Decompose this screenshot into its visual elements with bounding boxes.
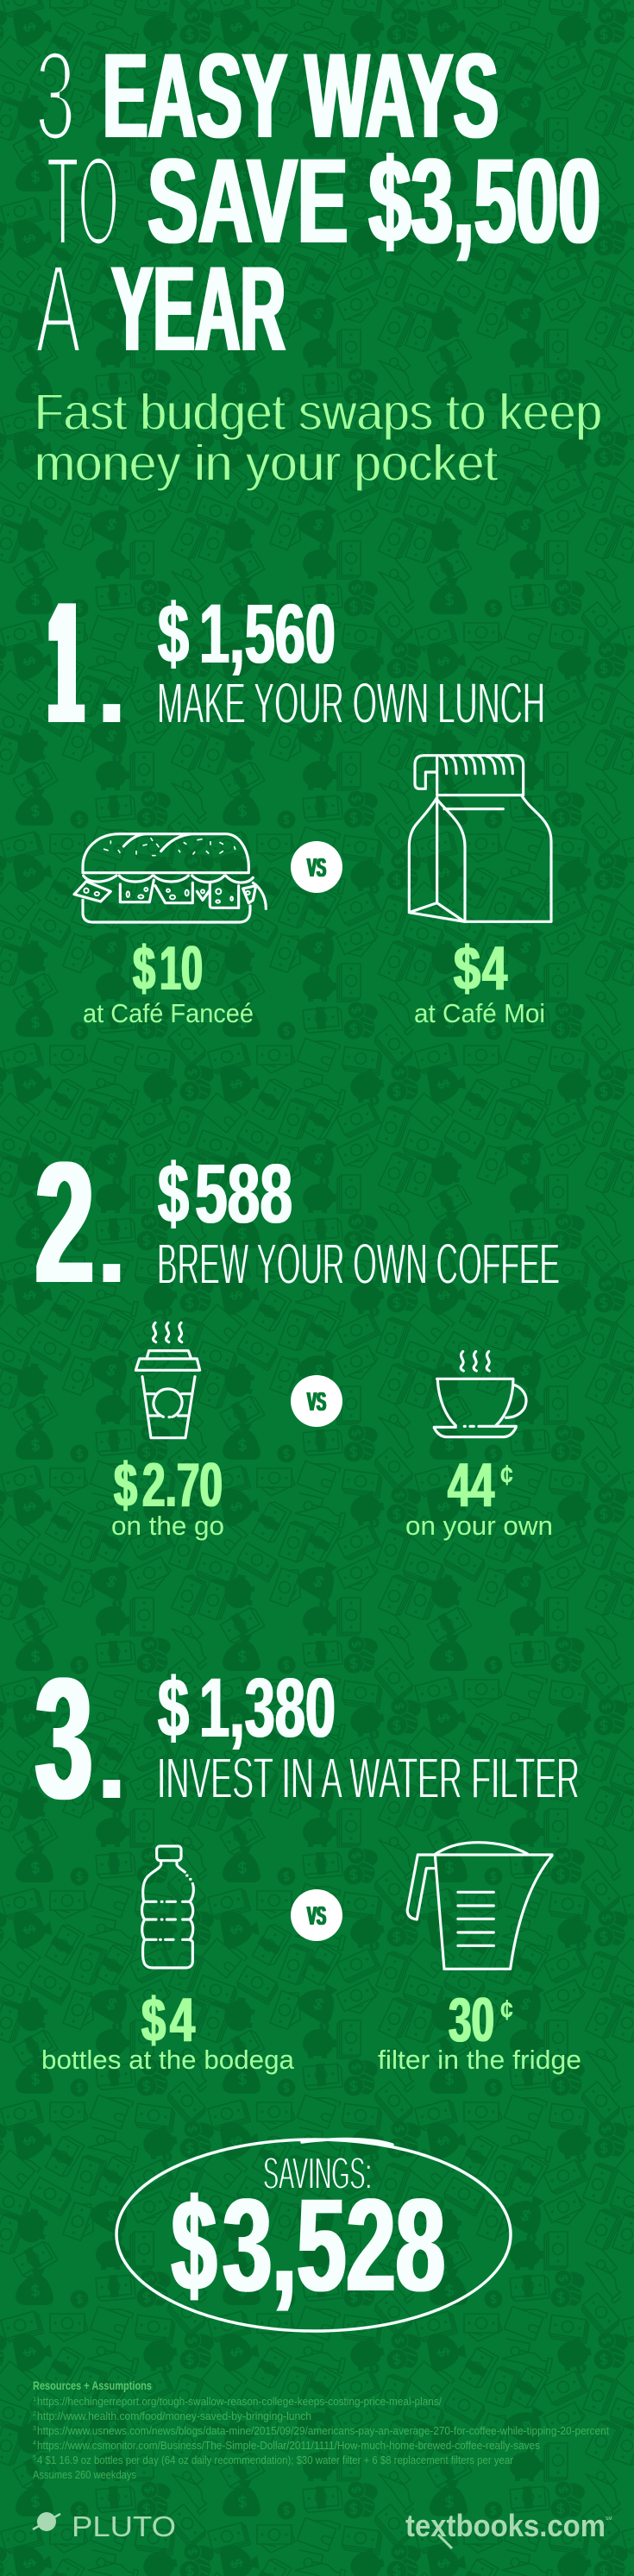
resources and assumptions: 4 (33, 2441, 36, 2447)
price: home (414, 934, 545, 1028)
amount (158, 1661, 336, 1755)
price: bottles (41, 1986, 295, 2075)
number 1: 1 (50, 567, 81, 759)
subtitle: money in your pocket (35, 435, 498, 492)
resources and assumptions: https://hechingerreport.org/tough-swallow-reason-college-keeps-costing-price-meal-plans/ (37, 2395, 442, 2408)
number 3: . (95, 1688, 129, 1824)
icon: water filter pitcher (407, 1843, 552, 1969)
price: on the go: on the go (111, 1511, 224, 1541)
amount: $ (158, 587, 189, 681)
number 2: 2 (35, 1127, 94, 1319)
vs badge: VS (307, 1901, 326, 1931)
resources and assumptions: https://www.csmonitor.com/Business/The-Simple-Dollar/2011/1111/How-much-home-brewed-coffee-really-saves (37, 2439, 540, 2452)
price: cafe: at Café Fanceé (83, 998, 254, 1028)
hand drawn ellipse (116, 2139, 511, 2331)
resources and assumptions: 2 (33, 2411, 36, 2417)
resources and assumptions: 3 (33, 2426, 36, 2432)
vs badge (291, 1375, 342, 1427)
callout: total savings (116, 2139, 511, 2331)
price: filter: ¢ (500, 1994, 513, 2026)
logo: textbooks.com: SM (606, 2516, 612, 2522)
savings amount (172, 2171, 445, 2319)
subtitle (35, 384, 602, 492)
price: filter: filter in the fridge (378, 2045, 581, 2075)
title: A (35, 238, 81, 380)
number 1: . (95, 613, 129, 748)
resources and assumptions: http://www.health.com/food/money-saved-by-bringing-lunch (37, 2410, 311, 2422)
amount: 588 (195, 1147, 292, 1241)
price: on your own (405, 1451, 553, 1541)
resources and assumptions: 4 $1 16.9 oz bottles per day (64 oz daily recommendation); $30 water filter + 6 $8 replacement filters per year (37, 2453, 514, 2466)
amount (158, 587, 336, 681)
vs badge (291, 841, 342, 893)
price: on the go (111, 1451, 224, 1541)
price: cafe: $ (133, 934, 155, 1003)
resources and assumptions (33, 2378, 609, 2481)
price: home: $ (454, 934, 480, 1003)
resources and assumptions: Assumes 260 weekdays (33, 2468, 136, 2481)
title: TO (47, 130, 119, 273)
vs badge: VS (307, 852, 326, 883)
number 3: 3 (35, 1643, 92, 1835)
panel: way 2 coffee (35, 1127, 560, 1541)
title: 3 (35, 25, 75, 167)
panel: way 3 water (35, 1643, 581, 2075)
price: cafe (83, 934, 254, 1028)
number 2: . (95, 1172, 129, 1308)
logo: pluto (33, 2510, 176, 2542)
icon: sandwich (74, 834, 266, 922)
price: on the go: $ (114, 1451, 137, 1520)
price: bottles: 4 (170, 1986, 195, 2055)
resources and assumptions: 5 (33, 2455, 36, 2461)
amount (158, 1147, 292, 1241)
price: home: 4 (482, 934, 507, 1003)
price: filter (378, 1986, 581, 2075)
price: on the go: 2.70 (142, 1451, 223, 1520)
amount: 1,560 (199, 587, 336, 681)
price: on your own: 44 (448, 1451, 494, 1520)
price: on your own: on your own (405, 1511, 553, 1541)
savings label: SAVINGS: (263, 2149, 372, 2199)
vs badge (291, 1889, 342, 1941)
price: bottles: bottles at the bodega (41, 2045, 295, 2075)
price: filter: 30 (449, 1986, 494, 2055)
logo: textbooks.com: textbooks.com (405, 2508, 606, 2543)
price: cafe: 10 (160, 934, 203, 1003)
price: on your own: ¢ (500, 1459, 513, 1491)
title: YEAR (111, 241, 286, 376)
amount: 1,380 (199, 1661, 336, 1755)
savings amount: $ (172, 2171, 217, 2319)
logo: pluto: PLUTO (72, 2510, 176, 2542)
resources and assumptions: Resources + Assumptions (33, 2378, 152, 2392)
icon: takeaway cup (135, 1323, 200, 1438)
subtitle: Fast budget swaps to keep (35, 384, 602, 441)
price: home: at Café Moi (414, 998, 545, 1028)
price: bottles: $ (141, 1986, 166, 2055)
vs badge: VS (307, 1386, 326, 1417)
title (35, 25, 600, 380)
panel: way 1 lunch (50, 567, 551, 1028)
icon: paper bag (409, 756, 551, 921)
amount: $ (158, 1661, 189, 1755)
savings amount: 3,528 (223, 2171, 445, 2319)
resources and assumptions: 1 (33, 2397, 36, 2403)
icon: water bottle (142, 1846, 193, 1968)
amount: $ (158, 1147, 189, 1241)
icon: coffee cup (434, 1352, 526, 1437)
